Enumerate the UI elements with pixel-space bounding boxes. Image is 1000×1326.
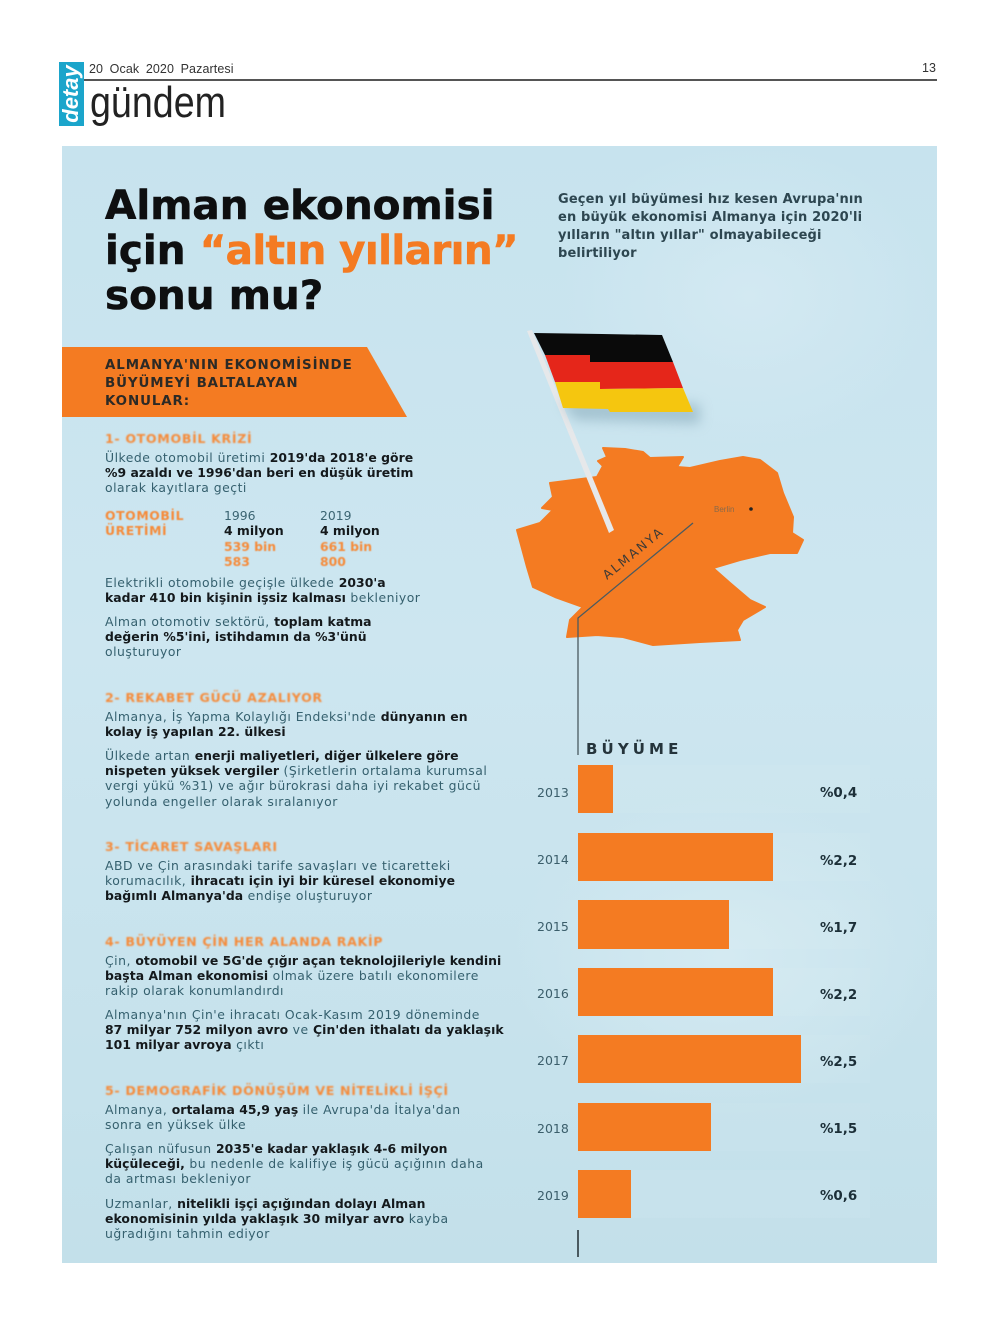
intro text: Geçen yıl büyümesi hız kesen Avrupa'nın: [558, 192, 863, 207]
flag pole: [527, 330, 614, 533]
text 1c: [105, 614, 372, 659]
text 5: sonra en yüksek ülke: [105, 1117, 246, 1132]
text 5c: uğradığını tahmin ediyor: [105, 1226, 270, 1241]
text 2: kolay iş yapılan 22. ülkesi: [105, 724, 286, 739]
bar 2016: %2,2: [820, 988, 857, 1003]
intro text: [558, 192, 863, 261]
text 4b: [105, 1007, 504, 1052]
text 3: korumacılık, ihracatı için iyi bir küresel ekonomiye: [105, 873, 455, 888]
text 5b: Çalışan nüfusun 2035'e kadar yaklaşık 4-6 milyon: [105, 1141, 448, 1156]
text 1c: oluşturuyor: [105, 644, 182, 659]
table: otomobil üretimi: 4 milyon: [320, 523, 380, 538]
bar 2013: [537, 765, 857, 813]
heading 3: 3- TİCARET SAVAŞLARI: [105, 839, 278, 854]
page number: 13: [922, 61, 936, 75]
orange banner: BÜYÜMEYİ BALTALAYAN: [105, 376, 299, 391]
text 2: Almanya, İş Yapma Kolaylığı Endeksi'nde dünyanın en: [105, 708, 468, 724]
text 4b: 87 milyar 752 milyon avro ve Çin'den ithalatı da yaklaşık: [105, 1022, 504, 1037]
text 2b: vergi yükü %31) ve ağır bürokrasi daha iyi rekabet gücü: [105, 778, 481, 793]
bar 2014: %2,2: [820, 854, 857, 869]
table: otomobil üretimi: OTOMOBİL: [105, 508, 184, 523]
title: Alman ekonomisi: [105, 181, 495, 229]
orange banner: KONULAR:: [105, 394, 190, 409]
text 3: bağımlı Almanya'da endişe oluşturuyor: [105, 888, 372, 903]
bar 2019: [537, 1170, 857, 1218]
bar 2017: 2017: [537, 1053, 569, 1068]
heading 4: 4- BÜYÜYEN ÇİN HER ALANDA RAKİP: [105, 934, 383, 949]
bar 2018: 2018: [537, 1121, 569, 1136]
bar 2019: 2019: [537, 1188, 569, 1203]
intro text: en büyük ekonomisi Almanya için 2020'li: [558, 210, 862, 225]
table: otomobil üretimi: 1996: [224, 508, 256, 523]
text 4: rakip olarak konumlandırdı: [105, 983, 284, 998]
heading 1: 1- OTOMOBİL KRİZİ: [105, 431, 252, 446]
text 4: Çin, otomobil ve 5G'de çığır açan teknolojileriyle kendini: [105, 953, 501, 968]
text 1b: kadar 410 bin kişinin işsiz kalması bekleniyor: [105, 590, 420, 605]
text 4: [105, 953, 501, 998]
table: otomobil üretimi: ÜRETİMİ: [105, 523, 167, 538]
table: otomobil üretimi: 4 milyon: [224, 523, 284, 538]
text 1b: [105, 575, 420, 605]
bar 2019: %0,6: [820, 1189, 857, 1204]
table: otomobil üretimi: 583: [224, 554, 250, 569]
bar 2016: [537, 968, 857, 1016]
text 2b: nispeten yüksek vergiler (Şirketlerin ortalama kurumsal: [105, 763, 487, 778]
leader line: [578, 523, 693, 755]
bar 2013: 2013: [537, 785, 569, 800]
orange banner: [62, 347, 408, 417]
text 4b: Almanya'nın Çin'e ihracatı Ocak-Kasım 2019 döneminde: [105, 1007, 480, 1022]
text 4b: 101 milyar avroya çıktı: [105, 1037, 264, 1052]
map and flag illustration: [516, 330, 804, 755]
table: otomobil üretimi: [104, 508, 380, 569]
text 3: ABD ve Çin arasındaki tarife savaşları ve ticaretteki: [105, 858, 451, 873]
text 2b: Ülkede artan enerji maliyetleri, diğer ülkelere göre: [105, 748, 459, 763]
flag: Germany: [534, 333, 700, 424]
text 1b: Elektrikli otomobile geçişle ülkede 2030'a: [105, 575, 386, 590]
text 1c: değerin %5'ini, istihdamın da %3'ünü: [105, 629, 367, 644]
map: Germany: [517, 448, 803, 645]
text 1: Ülkede otomobil üretimi 2019'da 2018'e göre: [105, 450, 413, 465]
text 2: [105, 708, 468, 739]
chart title: BÜYÜME: [586, 740, 682, 758]
text 1: olarak kayıtlara geçti: [105, 480, 247, 495]
text 5b: küçüleceği, bu nedenle de kalifiye iş gücü açığının daha: [105, 1156, 484, 1171]
title: sonu mu?: [105, 271, 323, 319]
title: için “altın yılların”: [105, 226, 518, 274]
date line: 20 Ocak 2020 Pazartesi: [89, 62, 234, 76]
text 3: [105, 858, 455, 903]
bar 2013: %0,4: [820, 786, 857, 801]
bar 2018: [537, 1103, 857, 1151]
intro text: yılların "altın yıllar" olmayabileceği: [558, 228, 822, 243]
label: ALMANYA: ALMANYA: [599, 524, 667, 582]
bar 2015: [537, 900, 857, 949]
text 2b: yolunda engeller olarak sıralanıyor: [105, 794, 338, 809]
text 5c: Uzmanlar, nitelikli işçi açığından dolayı Alman: [105, 1196, 426, 1211]
intro text: belirtiliyor: [558, 246, 637, 261]
text 5c: ekonomisinin yılda yaklaşık 30 milyar avro kayba: [105, 1211, 449, 1226]
title: [104, 181, 518, 319]
text 5b: da artması bekleniyor: [105, 1171, 251, 1186]
bar 2017: [537, 1035, 857, 1083]
text 5: Almanya, ortalama 45,9 yaş ile Avrupa'da İtalya'dan: [105, 1102, 461, 1117]
heading 2: 2- REKABET GÜCÜ AZALIYOR: [105, 690, 323, 705]
text 4: başta Alman ekonomisi olmak üzere batılı ekonomilere: [105, 968, 479, 983]
section heading: gündem: gündem: [90, 78, 226, 127]
text 1: %9 azaldı ve 1996'dan beri en düşük üretim: [105, 465, 413, 480]
text 5: [105, 1102, 461, 1132]
heading 5: 5- DEMOGRAFİK DÖNÜŞÜM VE NİTELİKLİ İŞÇİ: [105, 1083, 449, 1098]
bar 2015: 2015: [537, 919, 569, 934]
map: Germany: Berlin: [714, 505, 734, 514]
panel: infographic: [62, 146, 937, 1263]
text 5b: [105, 1141, 484, 1186]
text 2b: [105, 748, 487, 809]
bar 2014: 2014: [537, 852, 569, 867]
text 1: [105, 450, 413, 495]
table: otomobil üretimi: 539 bin: [224, 539, 276, 554]
bar 2015: %1,7: [820, 921, 857, 936]
bar 2017: %2,5: [820, 1055, 857, 1070]
table: otomobil üretimi: 2019: [320, 508, 352, 523]
text 1c: Alman otomotiv sektörü, toplam katma: [105, 614, 372, 629]
bar 2014: [537, 833, 857, 881]
table: otomobil üretimi: 661 bin: [320, 539, 372, 554]
table: otomobil üretimi: 800: [320, 554, 346, 569]
bar 2016: 2016: [537, 986, 569, 1001]
orange banner: ALMANYA'NIN EKONOMİSİNDE: [105, 358, 353, 373]
bar 2018: %1,5: [820, 1122, 857, 1137]
text 5c: [105, 1196, 449, 1241]
